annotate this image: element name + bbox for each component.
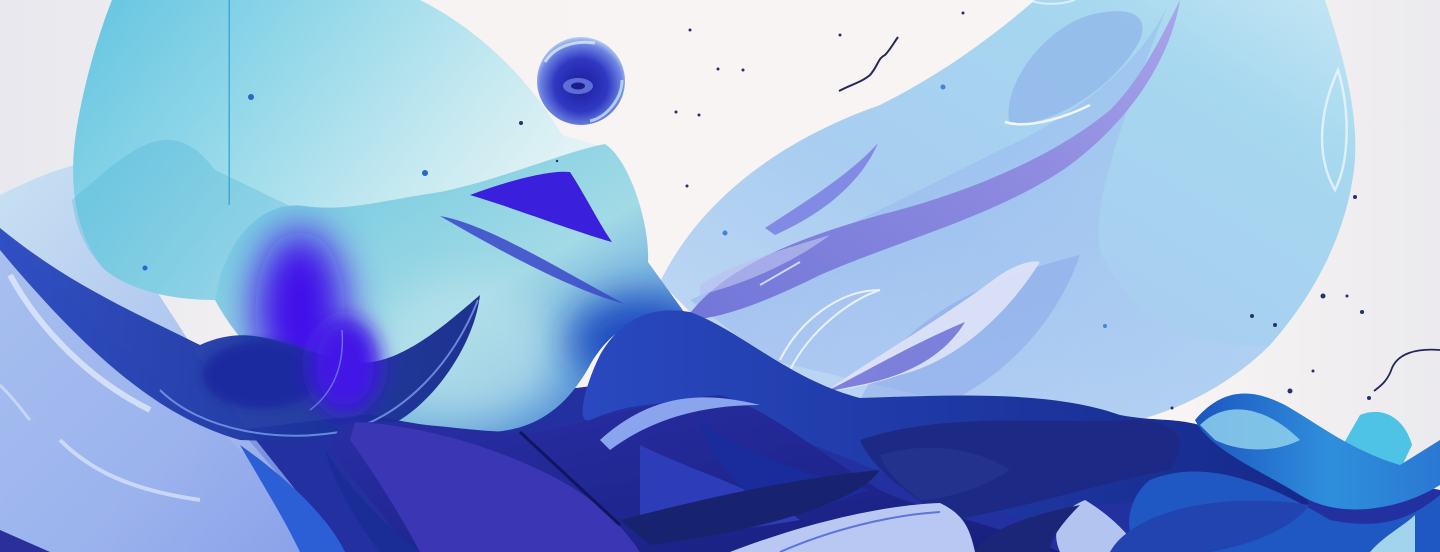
panel: pale bottom wave strip <box>730 500 1140 552</box>
scattered particle dots <box>142 12 1371 410</box>
panel: blue ribbon at lower right <box>1110 394 1440 552</box>
panel: dark blue ribbon fold at left <box>0 228 480 441</box>
panel: lower dark violet folds <box>0 395 1060 552</box>
squiggle: right edge <box>1374 350 1440 391</box>
panel: right translucent blue sheet <box>660 0 1355 430</box>
panel: base blue fill under lower ribbons <box>240 385 1440 552</box>
panel: navy woven ribbon across centre <box>583 310 1310 520</box>
icon: glass sphere <box>537 37 625 125</box>
panel: large cyan translucent sheet <box>72 0 600 300</box>
squiggle: upper right <box>839 37 898 91</box>
panel: purple petals on right sheet <box>685 0 1180 420</box>
panel: central cyan mound with textured peak <box>215 144 710 432</box>
panel: left pale translucent veil <box>0 165 345 552</box>
